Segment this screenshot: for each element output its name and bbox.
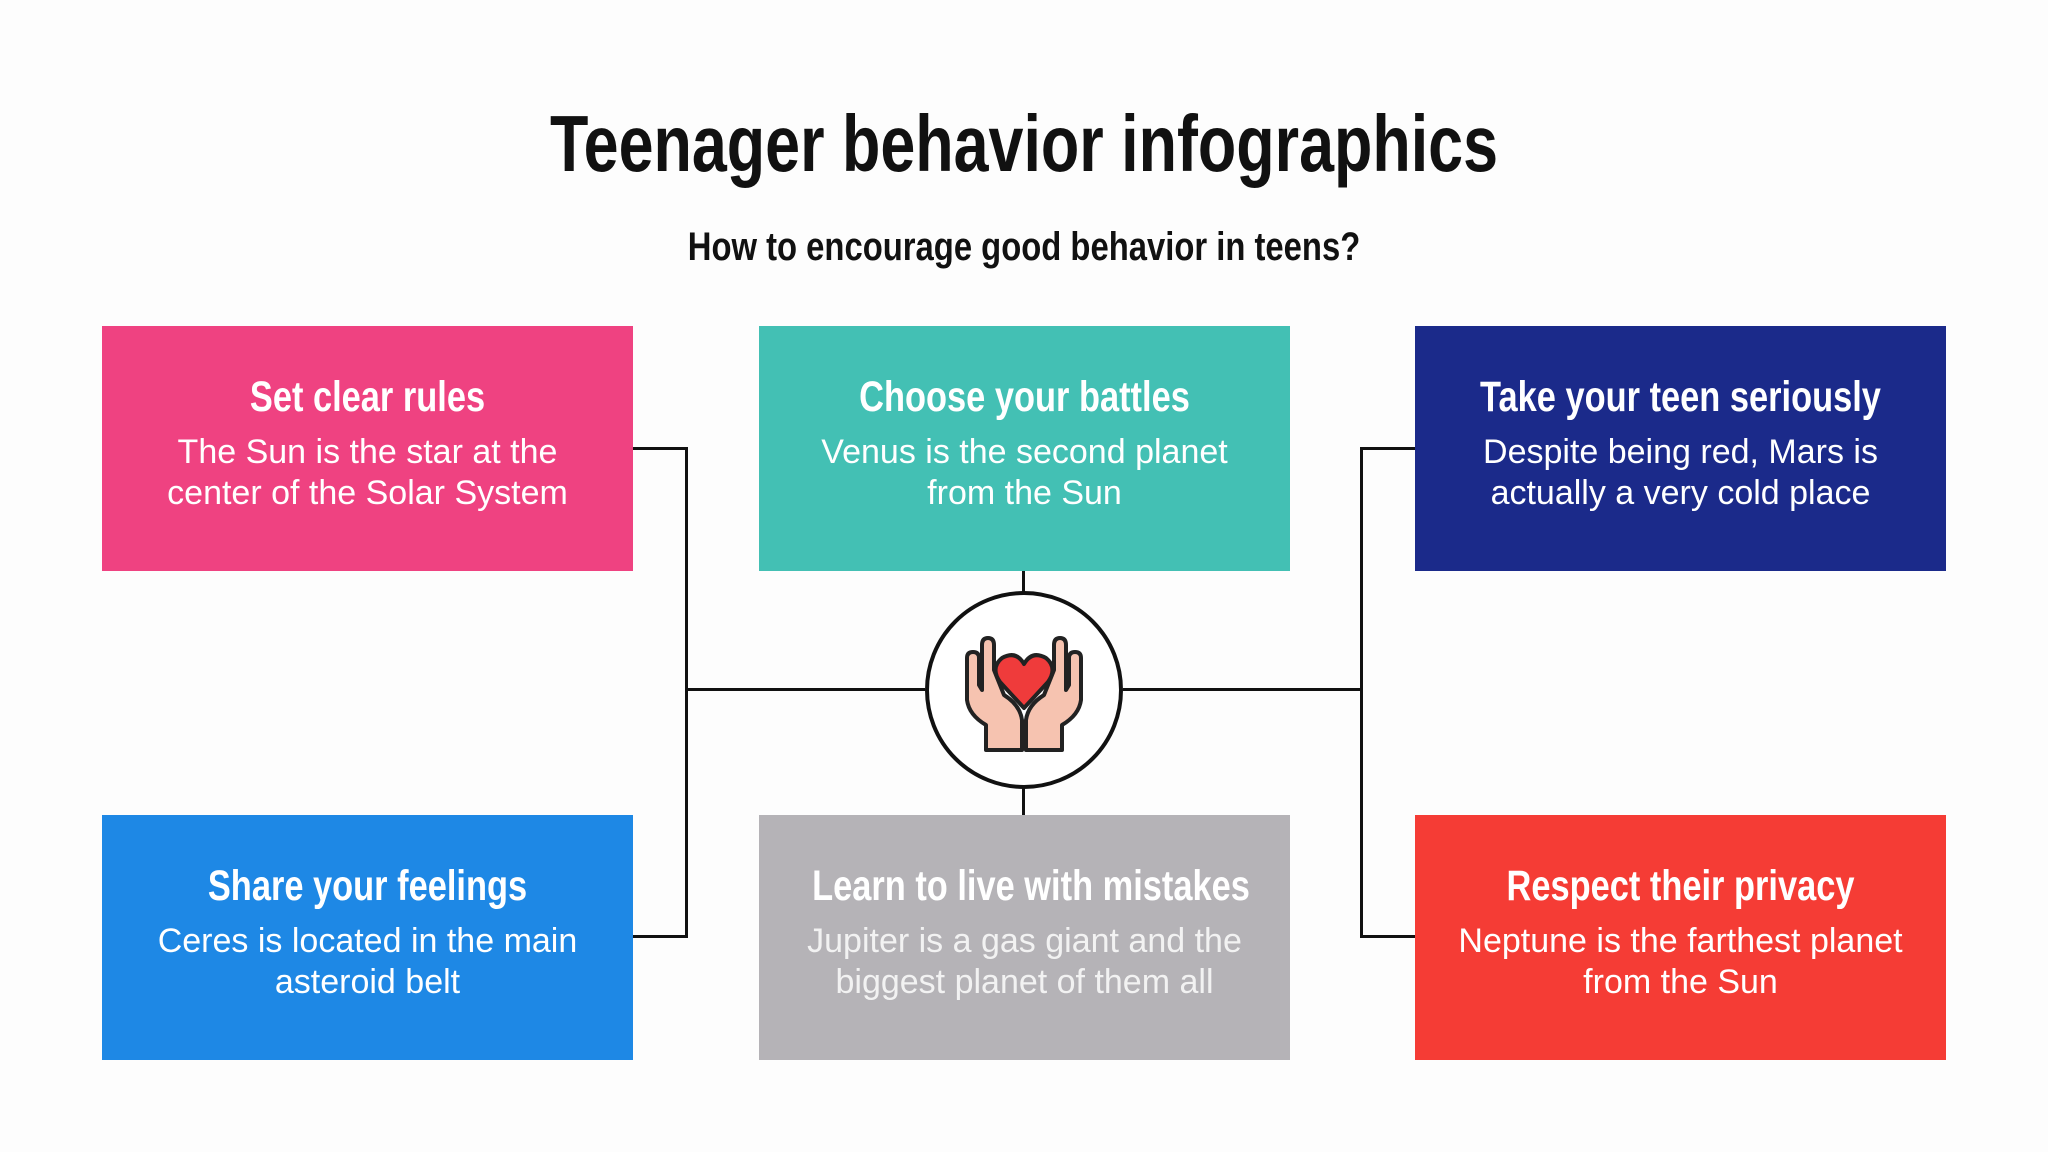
subtitle: How to encourage good behavior in teens? (688, 225, 1360, 269)
panel: learn to live with mistakes: Jupiter is a gas giant and the (807, 922, 1242, 960)
panel: choose your battles: Venus is the second planet (821, 433, 1228, 471)
panel: share your feelings: Share your feelings (208, 862, 527, 910)
panel: take your teen seriously: Take your teen seriously (1480, 373, 1881, 421)
center icon: hands holding heart (925, 591, 1123, 789)
panel: share your feelings (102, 815, 633, 1060)
panel: respect their privacy: Respect their privacy (1506, 862, 1854, 910)
panel: choose your battles (759, 326, 1290, 571)
panel: choose your battles: Choose your battles (859, 373, 1190, 421)
panel: choose your battles: from the Sun (927, 474, 1122, 512)
panel: learn to live with mistakes: biggest planet of them all (835, 963, 1214, 1001)
panel: set clear rules (102, 326, 633, 571)
panel: share your feelings: Ceres is located in the main (158, 922, 577, 960)
panel: respect their privacy: Neptune is the farthest planet (1458, 922, 1903, 960)
title: Teenager behavior infographics (550, 99, 1498, 188)
panel: take your teen seriously: actually a very cold place (1491, 474, 1870, 512)
panel: learn to live with mistakes (759, 815, 1290, 1060)
panel: set clear rules: The Sun is the star at the (178, 433, 557, 471)
panel: share your feelings: asteroid belt (275, 963, 460, 1001)
panel: take your teen seriously: Despite being red, Mars is (1483, 433, 1878, 471)
panel: respect their privacy: from the Sun (1583, 963, 1778, 1001)
panel: take your teen seriously (1415, 326, 1946, 571)
panel: learn to live with mistakes: Learn to live with mistakes (812, 862, 1250, 910)
panel: respect their privacy (1415, 815, 1946, 1060)
panel: set clear rules: Set clear rules (250, 373, 485, 421)
panel: set clear rules: center of the Solar System (167, 474, 568, 512)
